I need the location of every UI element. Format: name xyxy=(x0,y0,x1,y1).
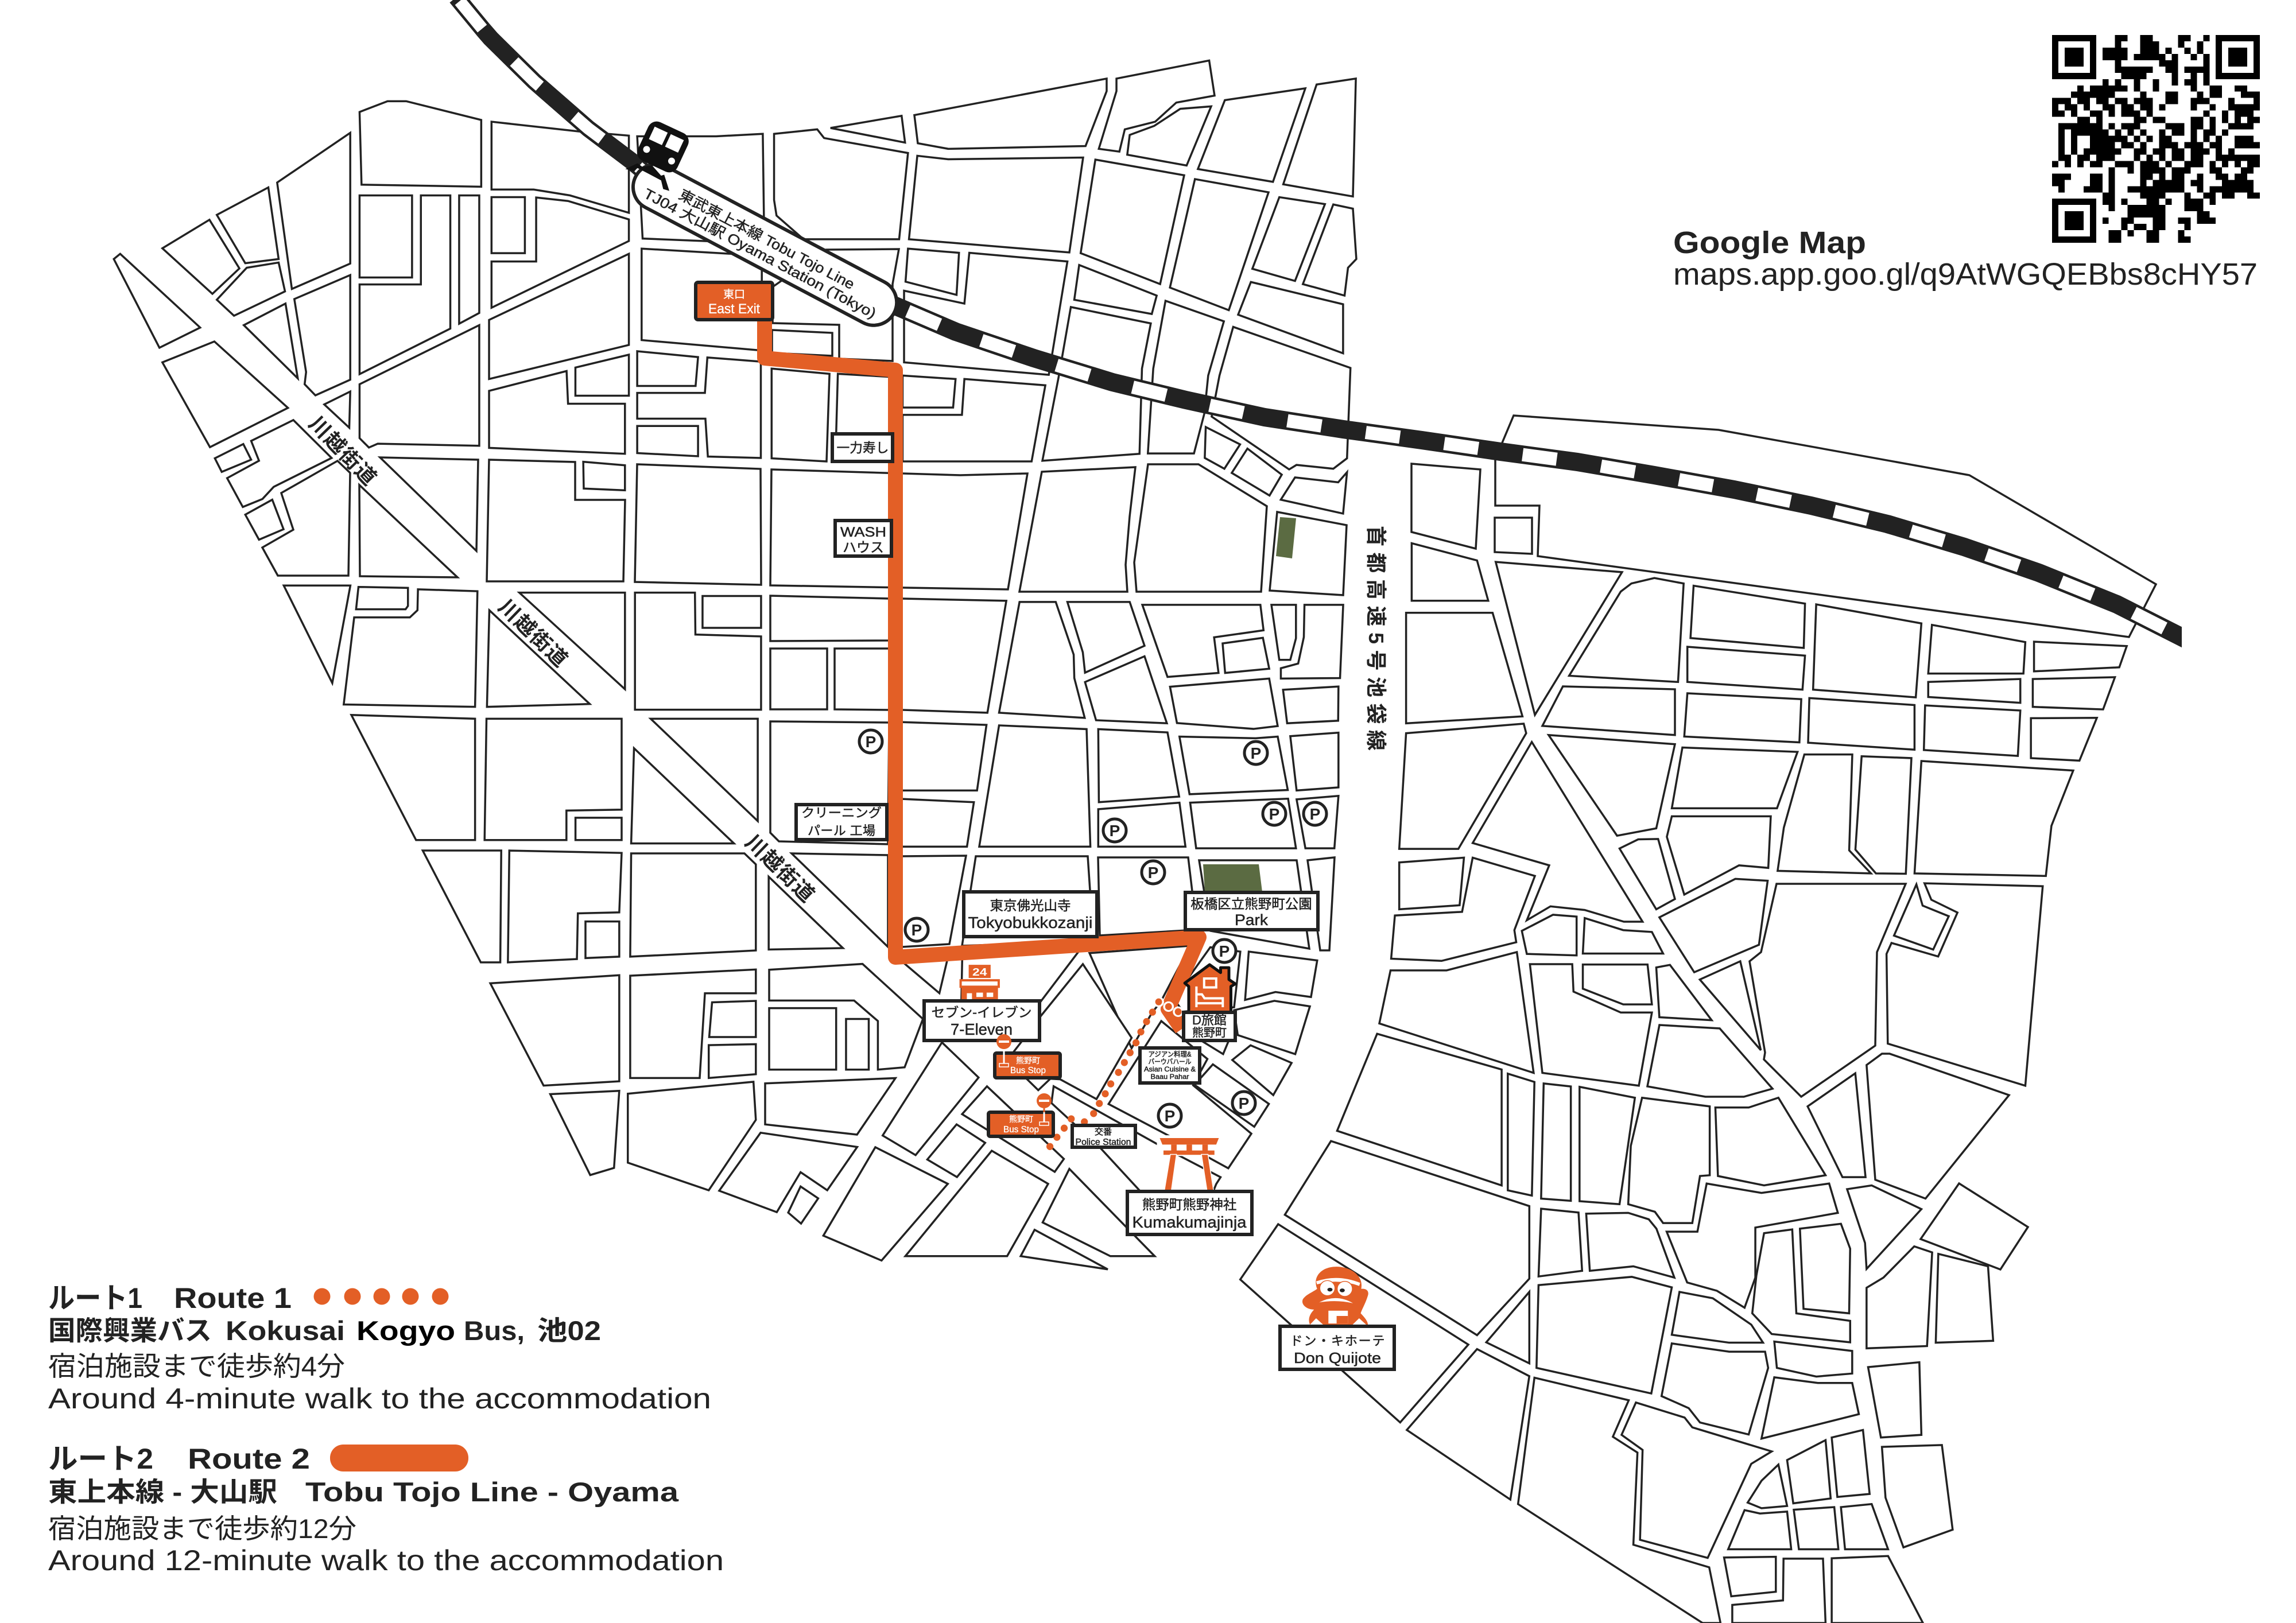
label: Tokyobukkozanji: Tokyobukkozanji xyxy=(968,914,1093,931)
label: Wash House: ハウス xyxy=(843,540,884,556)
label: Kumano shrine: Kumakumajinja xyxy=(1132,1213,1247,1231)
legend: route 2 xyxy=(48,1443,724,1577)
railway line xyxy=(456,0,2216,666)
legend: route 1: Kogyo xyxy=(356,1315,455,1346)
label: Bus Stop south: 熊野町 xyxy=(1009,1115,1033,1124)
label: Bus Stop north: Bus Stop xyxy=(1010,1066,1046,1075)
icon: bus pole south xyxy=(1037,1093,1052,1125)
label: Don Quijote: ドン・キホーテ xyxy=(1290,1334,1384,1348)
label: Ichiriki sushi: 一力寿し xyxy=(837,440,889,455)
label: accommodation D Ryokan: D旅館 xyxy=(1192,1013,1227,1027)
blocks: north-west xyxy=(114,101,764,539)
label: Police Station: 交番 xyxy=(1095,1127,1112,1137)
station name pill: TJ04 大山駅 Oyama Station (Tokyo) xyxy=(641,185,879,322)
label: Don Quijote: Don Quijote xyxy=(1294,1349,1381,1366)
label: accommodation D Ryokan: 熊野町 xyxy=(1192,1026,1227,1039)
blocks: crossing zones xyxy=(262,249,2156,1269)
label: Bus Stop south xyxy=(988,1112,1053,1136)
label: Wash House: WASH xyxy=(840,525,886,540)
label: 7-Eleven xyxy=(924,1001,1040,1040)
label: Asian Cuisine xyxy=(1140,1048,1200,1083)
label: 7-Eleven: 7-Eleven xyxy=(951,1020,1013,1038)
label: Cleaning Pearl: クリーニング xyxy=(801,806,882,820)
label: accommodation D Ryokan xyxy=(1184,1012,1235,1040)
legend: route 2: Around 12-minute walk to the accommodation xyxy=(48,1544,724,1577)
legend: route 1: Bus, xyxy=(464,1315,525,1346)
label: Cleaning Pearl: パール 工場 xyxy=(808,824,875,838)
label: Bus Stop south: Bus Stop xyxy=(1003,1125,1039,1135)
label: Asian Cuisine: Baau Pahar xyxy=(1150,1073,1189,1081)
blocks: west xyxy=(284,585,857,1224)
blocks: north-centre xyxy=(771,60,1356,514)
label: Cleaning Pearl xyxy=(796,805,887,840)
label: Bus Stop north xyxy=(995,1053,1060,1078)
label: 7-Eleven: セブン-イレブン xyxy=(931,1005,1032,1020)
label: Bus Stop north: 熊野町 xyxy=(1016,1056,1040,1065)
parking icons: P xyxy=(1165,1107,1175,1125)
icon: convenience store xyxy=(961,965,999,1001)
parking icons: P xyxy=(1239,1094,1249,1112)
legend: route 1: Route 1 xyxy=(174,1282,292,1314)
blocks: centre xyxy=(895,599,1343,848)
label: Police Station xyxy=(1072,1125,1135,1147)
road name: Metropolitan Expressway: 首都高速5号池袋線 xyxy=(1364,526,1388,751)
label: Ichiriki sushi xyxy=(832,434,893,461)
road name: Kawagoe Kaido: 川越街道 xyxy=(740,830,819,907)
blocks: east xyxy=(1379,543,2127,1086)
Google Map URL: maps.app.goo.gl/q9AtWGQEBbs8cHY57 xyxy=(1673,257,2258,292)
icon: torii gate xyxy=(1157,1135,1221,1192)
park green areas xyxy=(1203,517,1296,892)
label: Tokyobukkozanji: 東京佛光山寺 xyxy=(990,898,1071,913)
station name pill xyxy=(625,156,905,333)
legend: route 1: ルート1 xyxy=(48,1282,142,1314)
label: Kumano shrine: 熊野町熊野神社 xyxy=(1142,1197,1236,1212)
label: East Exit xyxy=(696,282,773,320)
icon: convenience store: 24 xyxy=(972,966,987,978)
blocks: south-east xyxy=(1240,1034,2009,1623)
parking icons: P xyxy=(1251,744,1261,762)
parking icons: P xyxy=(866,733,876,751)
legend: route 2: Route 2 xyxy=(188,1443,310,1475)
legend: route 1: 宿泊施設まで徒歩約4分 xyxy=(48,1351,345,1381)
parking icons xyxy=(859,730,1327,1127)
route 1 dotted line xyxy=(1046,997,1182,1150)
legend: route 2: 宿泊施設まで徒歩約12分 xyxy=(48,1513,356,1544)
station name pill: 東武東上本線 Tobu Tojo Line xyxy=(676,187,857,293)
label: East Exit: East Exit xyxy=(708,301,760,317)
Google Map heading: Google Map xyxy=(1673,226,1866,260)
road name: Kawagoe Kaido: 川越街道 xyxy=(494,595,572,671)
label: Police Station: Police Station xyxy=(1076,1137,1131,1147)
icon: Don Quijote mascot xyxy=(1302,1267,1368,1326)
label: Park: Park xyxy=(1235,911,1269,929)
route 2 orange line xyxy=(765,314,1199,1029)
label: Don Quijote xyxy=(1280,1326,1394,1369)
parking icons: P xyxy=(1110,822,1120,840)
parking icons: P xyxy=(912,921,922,939)
icon: accommodation house xyxy=(1185,965,1235,1012)
label: Kumano shrine xyxy=(1127,1191,1252,1234)
road name: Kawagoe Kaido xyxy=(304,411,819,907)
legend: route 1: 池02 xyxy=(537,1315,601,1346)
icon: bus pole north xyxy=(996,1034,1011,1067)
QR code xyxy=(2052,35,2260,243)
parking icons: P xyxy=(1148,864,1158,882)
parking icons: P xyxy=(1269,805,1279,823)
label: Tokyobukkozanji xyxy=(964,892,1097,937)
label: Asian Cuisine: Asian Cuisine & xyxy=(1144,1065,1196,1073)
legend: route 2: ルート2 xyxy=(48,1443,153,1475)
legend: route 1: Around 4-minute walk to the accommodation xyxy=(48,1383,711,1415)
label: Asian Cuisine: アジアン料理& xyxy=(1148,1050,1192,1058)
label: Park: 板橋区立熊野町公園 xyxy=(1190,896,1312,911)
parking icons: P xyxy=(1310,805,1320,823)
label: Park xyxy=(1185,892,1318,930)
legend: route 1: Kokusai xyxy=(226,1315,345,1346)
road name: Kawagoe Kaido: 川越街道 xyxy=(304,411,381,490)
legend: route 1: 国際興業バス xyxy=(48,1315,212,1346)
label: Wash House xyxy=(835,521,891,556)
icon: train xyxy=(625,118,692,191)
label: Asian Cuisine: バーウバハール xyxy=(1148,1058,1192,1066)
legend: route 1 xyxy=(48,1282,711,1415)
blocks: south-centre xyxy=(765,946,1317,1269)
legend: route 2: 東上本線 - 大山駅 xyxy=(48,1477,277,1507)
label: East Exit: 東口 xyxy=(723,288,745,301)
blocks: shrine area xyxy=(1013,964,1251,1195)
legend: route 2: Tobu Tojo Line - Oyama xyxy=(305,1477,679,1507)
parking icons: P xyxy=(1219,942,1230,960)
